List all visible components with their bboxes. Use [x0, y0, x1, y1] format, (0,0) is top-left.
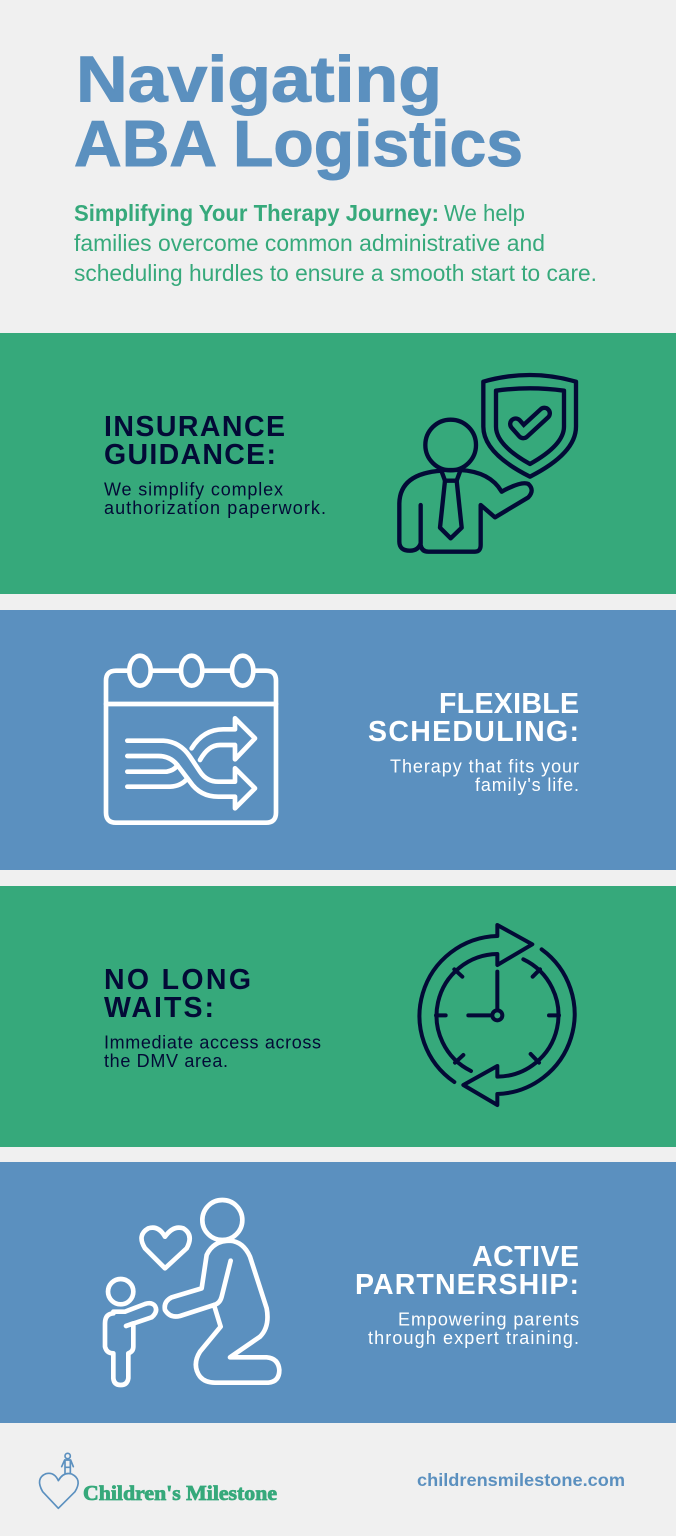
icon: parent and child with heart	[105, 1200, 279, 1385]
website link: childrensmilestone.com	[417, 1470, 625, 1490]
heading: insurance guidance	[104, 411, 285, 471]
intro text: scheduling hurdles to ensure a smooth start to care.	[74, 260, 597, 286]
text: insurance description: authorization paperwork.	[104, 498, 326, 518]
intro text: We help	[444, 200, 525, 226]
title: Navigating	[76, 42, 442, 116]
text: partnership description: through expert training.	[368, 1328, 579, 1348]
heading: active partnership: ACTIVE	[472, 1241, 579, 1273]
title: ABA Logistics	[74, 107, 523, 180]
heading: insurance guidance: GUIDANCE:	[104, 439, 276, 471]
heading: flexible scheduling	[368, 688, 579, 748]
text: scheduling description: family's life.	[475, 775, 579, 795]
text: waits description: the DMV area.	[104, 1051, 228, 1071]
panel: no long waits	[0, 886, 676, 1147]
icon: heart with child	[40, 1453, 78, 1508]
logo: Children's Milestone	[40, 1453, 277, 1508]
icon: calendar with shuffle arrows	[106, 656, 276, 823]
icon: person with shield	[399, 375, 576, 552]
heading: no long waits	[104, 964, 251, 1024]
panel: flexible scheduling	[0, 610, 676, 870]
text: insurance description	[104, 480, 326, 518]
heading: insurance guidance: INSURANCE	[104, 411, 285, 443]
intro text: Simplifying Your Therapy Journey:	[74, 200, 439, 226]
heading: flexible scheduling: FLEXIBLE	[439, 688, 579, 720]
icon: clock with circular arrows	[420, 925, 575, 1105]
text: scheduling description	[390, 756, 579, 795]
heading: no long waits: WAITS:	[104, 992, 214, 1024]
heading: no long waits: NO LONG	[104, 964, 251, 996]
heading: active partnership	[355, 1241, 579, 1301]
intro text: families overcome common administrative and	[74, 230, 545, 256]
text: partnership description	[368, 1310, 579, 1348]
panel: insurance guidance	[0, 333, 676, 594]
heading: flexible scheduling: SCHEDULING:	[368, 716, 579, 748]
heading: active partnership: PARTNERSHIP:	[355, 1269, 579, 1301]
text: insurance description: We simplify complex	[104, 480, 283, 500]
text: waits description	[104, 1032, 321, 1071]
text: scheduling description: Therapy that fits your	[390, 756, 579, 776]
title	[74, 42, 523, 180]
logo wordmark: Children's Milestone	[83, 1481, 277, 1505]
text: waits description: Immediate access across	[104, 1032, 321, 1052]
panel: active partnership	[0, 1162, 676, 1423]
text: partnership description: Empowering parents	[398, 1310, 579, 1330]
intro text	[74, 200, 597, 286]
